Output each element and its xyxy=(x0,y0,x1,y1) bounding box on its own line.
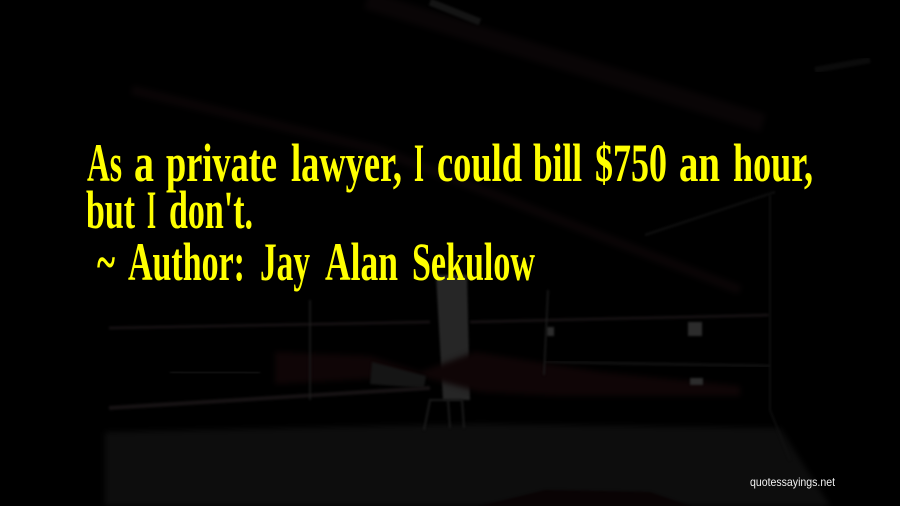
ring floor xyxy=(105,424,830,506)
line 1: I xyxy=(414,133,424,193)
line 1: a xyxy=(134,133,154,193)
author line: Sekulow xyxy=(412,232,535,292)
watermark: quotessayings.net xyxy=(750,475,836,489)
small white patches xyxy=(547,322,703,385)
dark red floor shadow xyxy=(480,490,690,506)
line 1: lawyer, xyxy=(291,133,402,193)
line 1: bill xyxy=(533,133,582,193)
line 1: could xyxy=(437,133,522,193)
left diagonal beam xyxy=(132,90,740,290)
ring sign xyxy=(370,362,426,388)
vertical ties xyxy=(310,290,548,400)
quote text xyxy=(86,133,813,292)
line 1: hour, xyxy=(733,133,813,193)
line 1: private xyxy=(166,133,277,193)
line 1: an xyxy=(679,133,720,193)
red ring padding xyxy=(275,352,740,396)
author line: ~ xyxy=(97,232,115,292)
top rope xyxy=(109,315,769,328)
lower rope xyxy=(109,388,430,408)
line 1: $750 xyxy=(595,133,667,193)
line 2 xyxy=(86,180,253,240)
corner post xyxy=(436,275,470,400)
line 2: I xyxy=(147,180,156,240)
author line xyxy=(97,232,535,292)
corner stool xyxy=(424,400,464,430)
second rope right xyxy=(545,362,770,366)
line 2: don't. xyxy=(169,180,253,240)
right upper rail xyxy=(645,192,775,235)
line 1 xyxy=(87,133,813,193)
line 1: As xyxy=(87,133,122,193)
line 2: but xyxy=(86,180,135,240)
author line: Jay xyxy=(260,232,310,292)
author line: Author: xyxy=(128,232,245,292)
upper diagonal beam xyxy=(367,0,763,123)
author line: Alan xyxy=(325,232,398,292)
